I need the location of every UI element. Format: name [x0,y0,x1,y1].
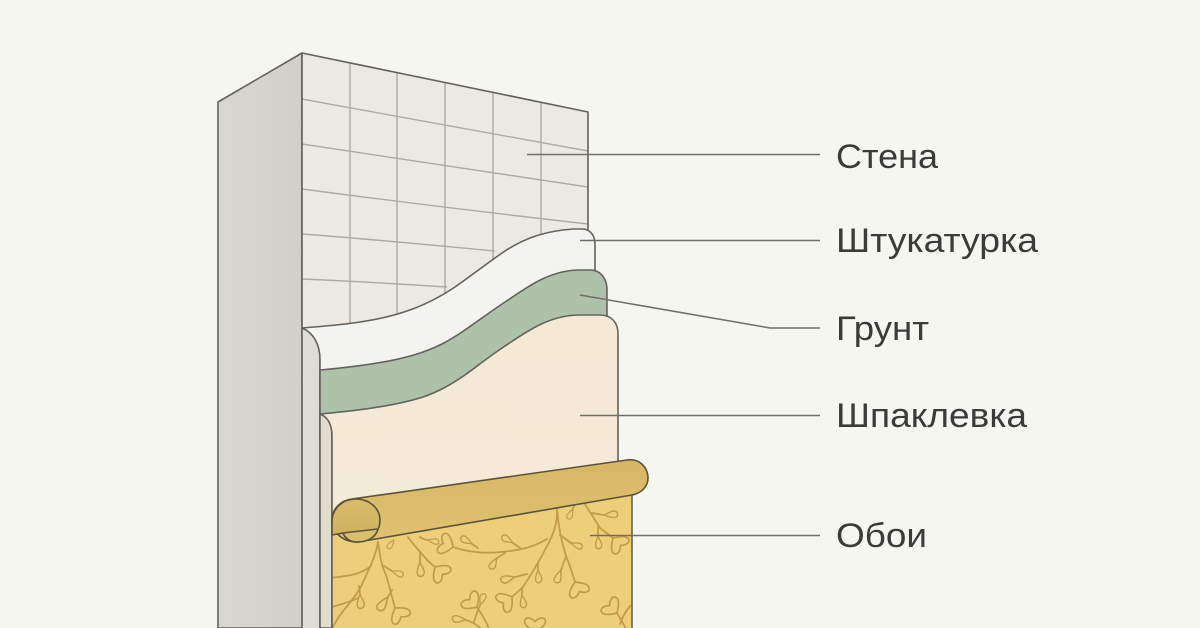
hearts [432,564,452,584]
wallpaper floral pattern [330,504,630,628]
wall edge strip [302,328,320,628]
layer: plaster [302,229,595,400]
layer: primer [320,270,607,440]
roll end cap [332,499,380,542]
wall front face [302,53,588,340]
label: Стена: Стена [836,138,938,176]
layer: wallpaper sheet with pattern [330,490,632,628]
label: Грунт [580,295,929,348]
wallpaper roll [332,460,648,542]
layered wall diagram [217,52,1038,628]
layer: putty [320,315,618,628]
leaves [386,540,394,550]
label: Обои: Обои [836,517,927,555]
label: Грунт: Грунт [836,310,929,348]
roll body [332,460,648,542]
wall side face [218,53,302,628]
wall: block with tile grid [218,53,588,628]
label: Шпаклевка: Шпаклевка [836,397,1027,435]
putty edge strip [320,414,332,628]
roll inner fold [343,529,378,542]
label: Штукатурка: Штукатурка [836,222,1038,260]
